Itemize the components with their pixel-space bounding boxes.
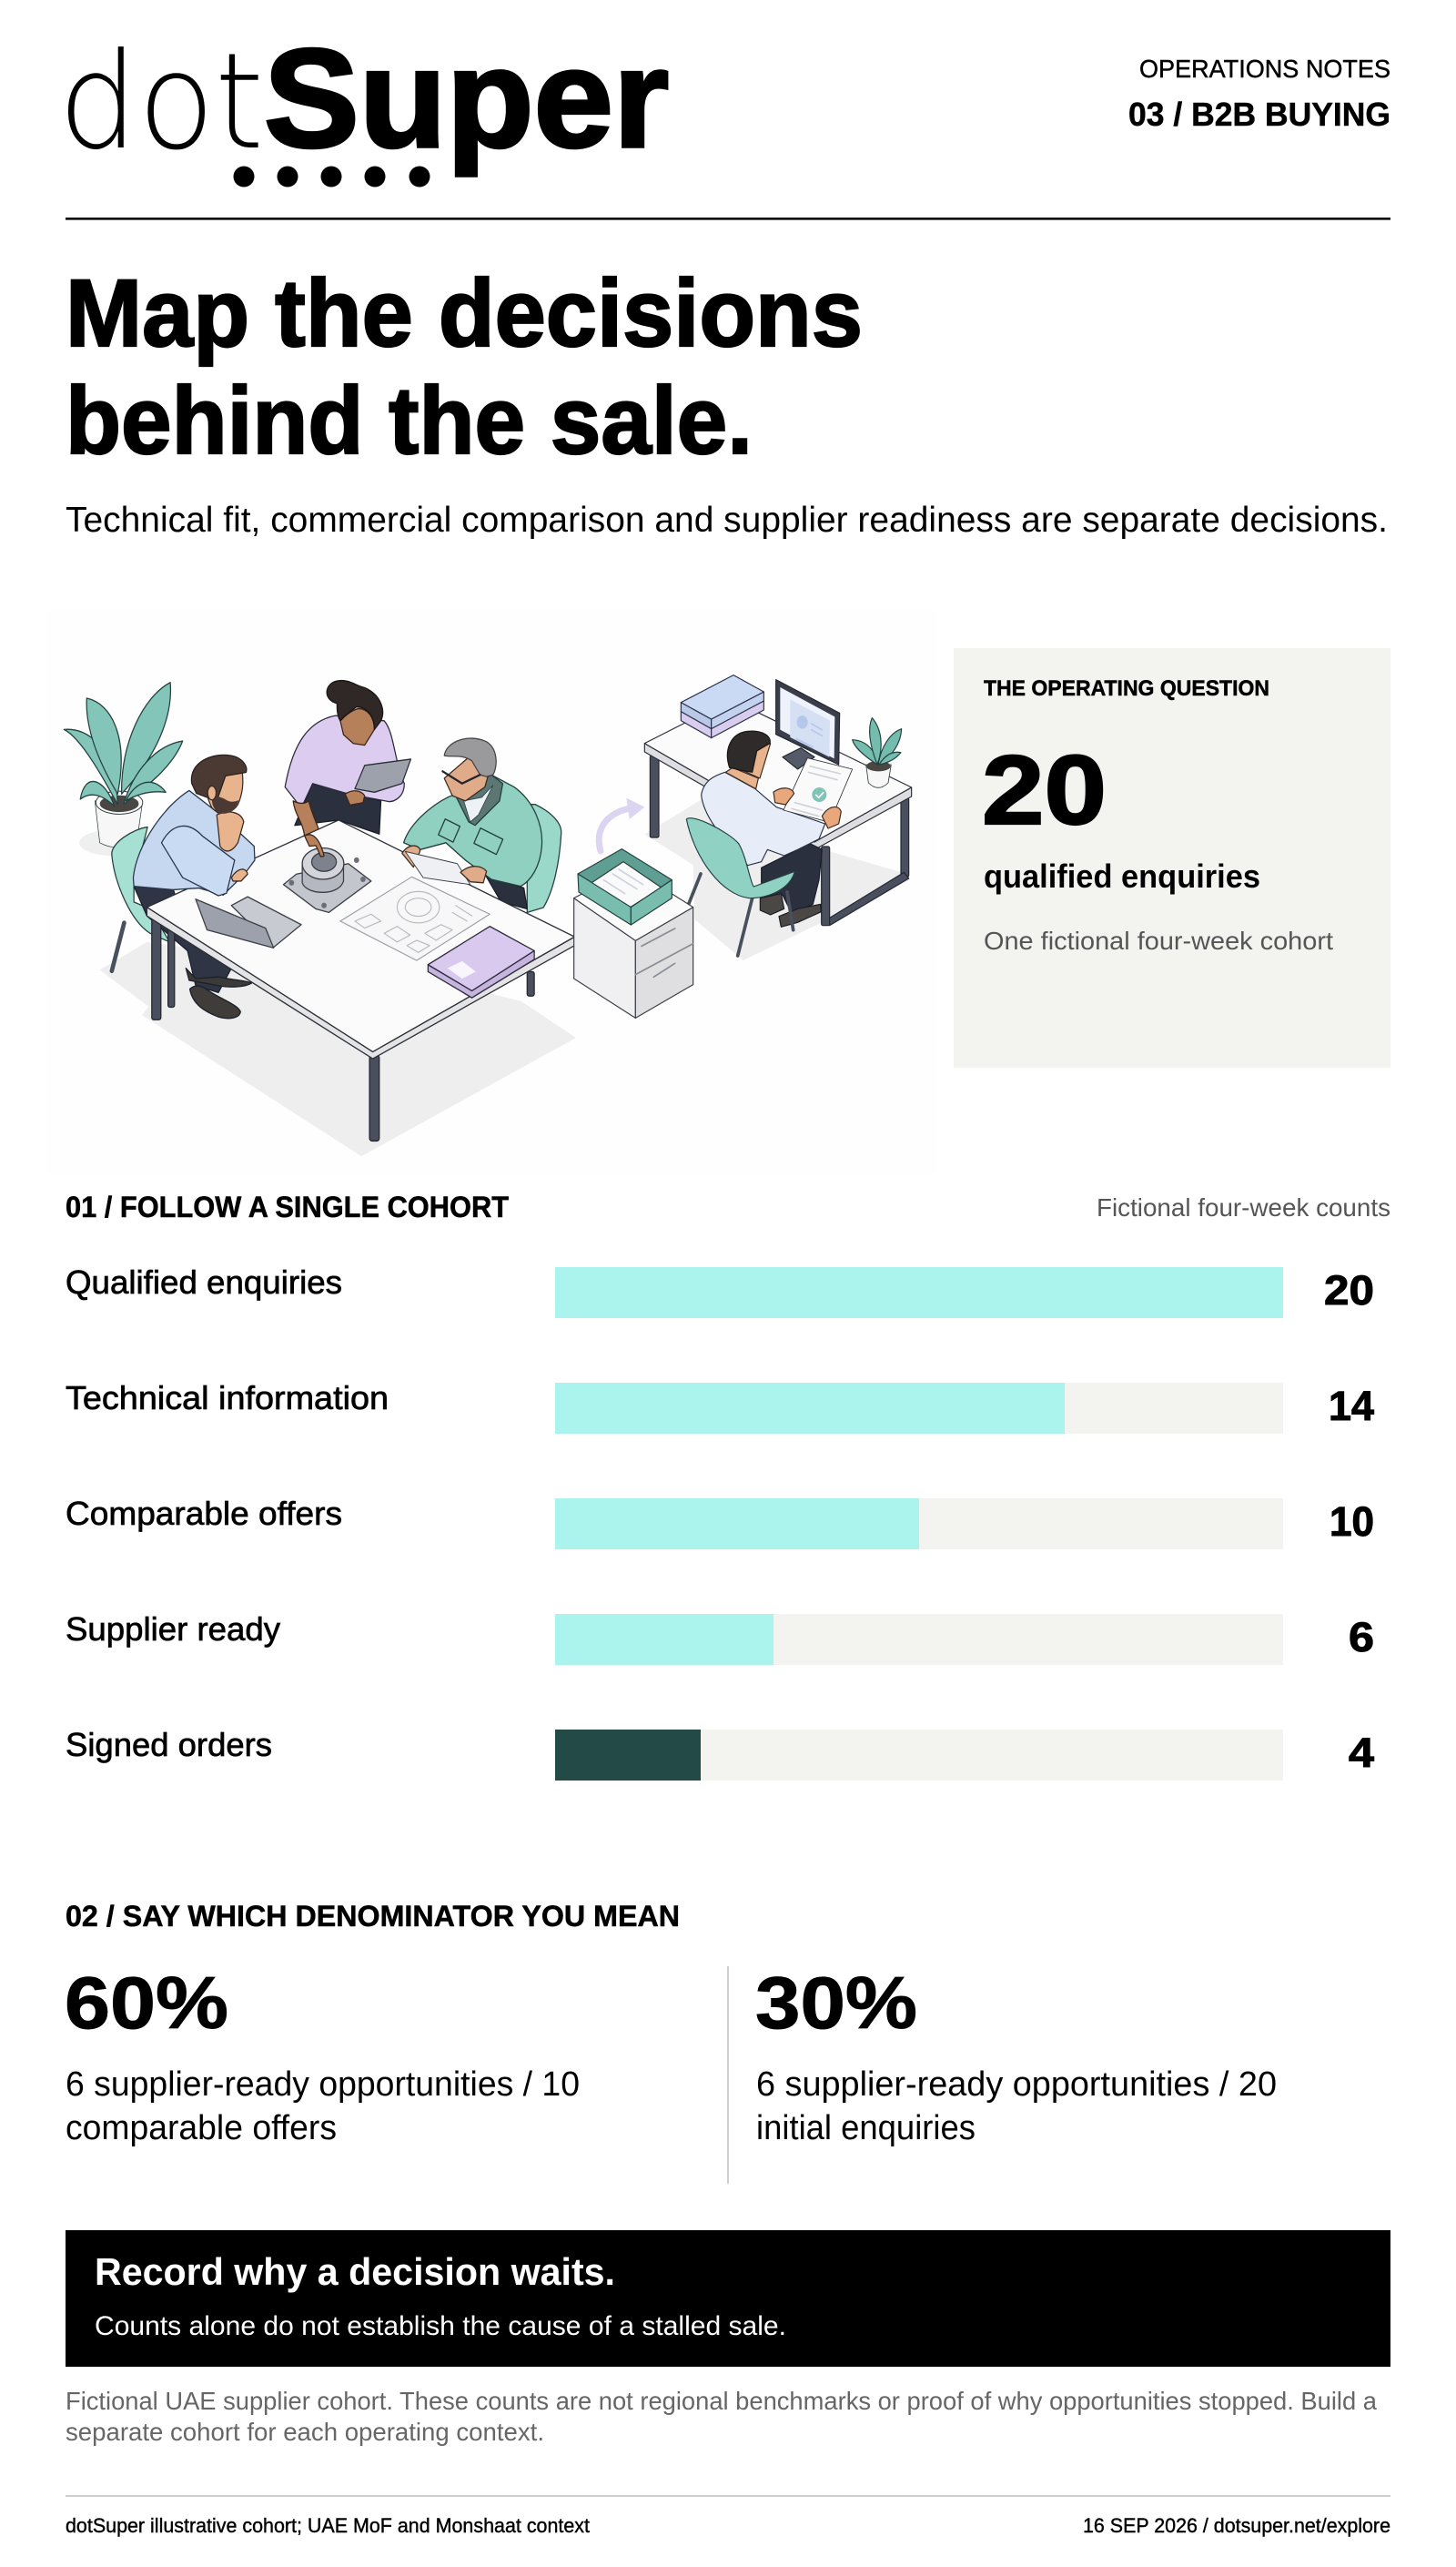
row: signed orders (66, 1726, 1374, 1781)
woman's pointing finger (305, 835, 324, 857)
panel: the operating question (954, 648, 1390, 1068)
row: comparable offers (66, 1495, 1374, 1549)
footer (66, 2514, 1390, 2537)
callout: Counts alone do not establish the cause of a stalled sale. (95, 2311, 786, 2341)
title: Map the decisions (66, 260, 863, 367)
stat: 60 percent: 60% (65, 1963, 228, 2044)
arrow (599, 798, 644, 851)
stat: 60 percent (65, 1963, 580, 2147)
illustration: team reviewing a machined part and a supplier desk (46, 610, 937, 1174)
row: technical information (66, 1379, 1374, 1434)
stat: 30 percent: 6 supplier-ready opportunities / 20 (756, 2065, 1277, 2104)
chair legs (689, 874, 794, 956)
filing cabinet (574, 868, 693, 1018)
subtitle: Technical fit, commercial comparison and supplier readiness are separate decisions. (66, 501, 1388, 540)
row: supplier ready: Supplier ready (66, 1610, 280, 1648)
table legs (152, 919, 534, 1141)
title: behind the sale. (66, 368, 753, 474)
row: technical information: Technical information (66, 1379, 389, 1416)
callout: Record why a decision waits. (95, 2250, 615, 2293)
row: comparable offers: 10 (1330, 1498, 1374, 1545)
callout (66, 2230, 1390, 2367)
disclaimer note: separate cohort for each operating context. (66, 2418, 544, 2446)
logo: dotSuper (58, 20, 669, 188)
small plant (853, 718, 902, 787)
row: supplier ready: 6 (1349, 1614, 1374, 1660)
supplier desk scene (574, 675, 912, 1018)
header (58, 20, 1390, 220)
paper tray (578, 849, 672, 925)
man right: grey hair, green jacket (402, 738, 542, 887)
row: supplier ready (66, 1610, 1374, 1665)
row: signed orders: 4 (1349, 1730, 1374, 1776)
document (784, 758, 853, 822)
man left: torso and head over table edge (133, 755, 255, 896)
footer: 16 SEP 2026 / dotsuper.net/explore (1083, 2514, 1390, 2537)
row: qualified enquiries (66, 1263, 1374, 1318)
paper held by right man (405, 851, 470, 885)
stacked binders (681, 675, 763, 738)
footer: dotSuper illustrative cohort; UAE MoF and Monshaat context (66, 2514, 590, 2537)
lavender binder (428, 927, 534, 998)
issue label: 03 / B2B BUYING (1128, 96, 1390, 133)
chair shell (686, 818, 794, 898)
disclaimer note (66, 2387, 1377, 2446)
meeting table scene (64, 681, 576, 1156)
disclaimer note: Fictional UAE supplier cohort. These counts are not regional benchmarks or proof of why opportunities stopped. Build a (66, 2387, 1377, 2415)
desk legs (650, 756, 909, 926)
row: comparable offers: Comparable offers (66, 1495, 342, 1532)
row: signed orders: Signed orders (66, 1726, 272, 1763)
desk top (644, 699, 912, 849)
logo: dotSuper: Super (264, 20, 669, 177)
section heading 02: 02 / SAY WHICH DENOMINATOR YOU MEAN (66, 1900, 680, 1933)
section heading 01: 01 / FOLLOW A SINGLE COHORT (66, 1191, 509, 1223)
stat: 30 percent (755, 1963, 1277, 2147)
stat: 60 percent: comparable offers (66, 2109, 337, 2147)
stat: 30 percent: initial enquiries (756, 2109, 976, 2147)
stat: 60 percent: 6 supplier-ready opportunities / 10 (66, 2065, 580, 2104)
number label: qualified enquiries (984, 857, 1260, 895)
row: technical information: 14 (1329, 1383, 1374, 1429)
desk shadow (644, 798, 910, 960)
big number 20: 20 (982, 735, 1107, 845)
seated reviewer (686, 731, 853, 956)
row: qualified enquiries: 20 (1324, 1267, 1374, 1314)
table shadow (100, 942, 576, 1156)
plant (64, 683, 183, 856)
man left: legs under table (134, 887, 251, 1019)
laptop (196, 897, 301, 948)
machined flange (283, 848, 371, 912)
monitor (776, 680, 840, 769)
row: qualified enquiries: Qualified enquiries (66, 1263, 342, 1301)
man right lap (485, 874, 527, 909)
woman standing, lavender shirt (285, 681, 410, 856)
logo: dotSuper: dot (58, 25, 264, 179)
title (66, 260, 863, 474)
table top (147, 820, 574, 1059)
series label: OPERATIONS NOTES (1139, 55, 1390, 83)
chair left (112, 827, 169, 971)
card heading: THE OPERATING QUESTION (984, 676, 1269, 701)
chair right (527, 805, 561, 912)
card note: One fictional four-week cohort (984, 927, 1333, 955)
stat: 30 percent: 30% (755, 1963, 917, 2044)
chart note: Fictional four-week counts (1097, 1193, 1390, 1222)
bar chart: cohort funnel (66, 1263, 1374, 1781)
blueprint (340, 877, 490, 960)
